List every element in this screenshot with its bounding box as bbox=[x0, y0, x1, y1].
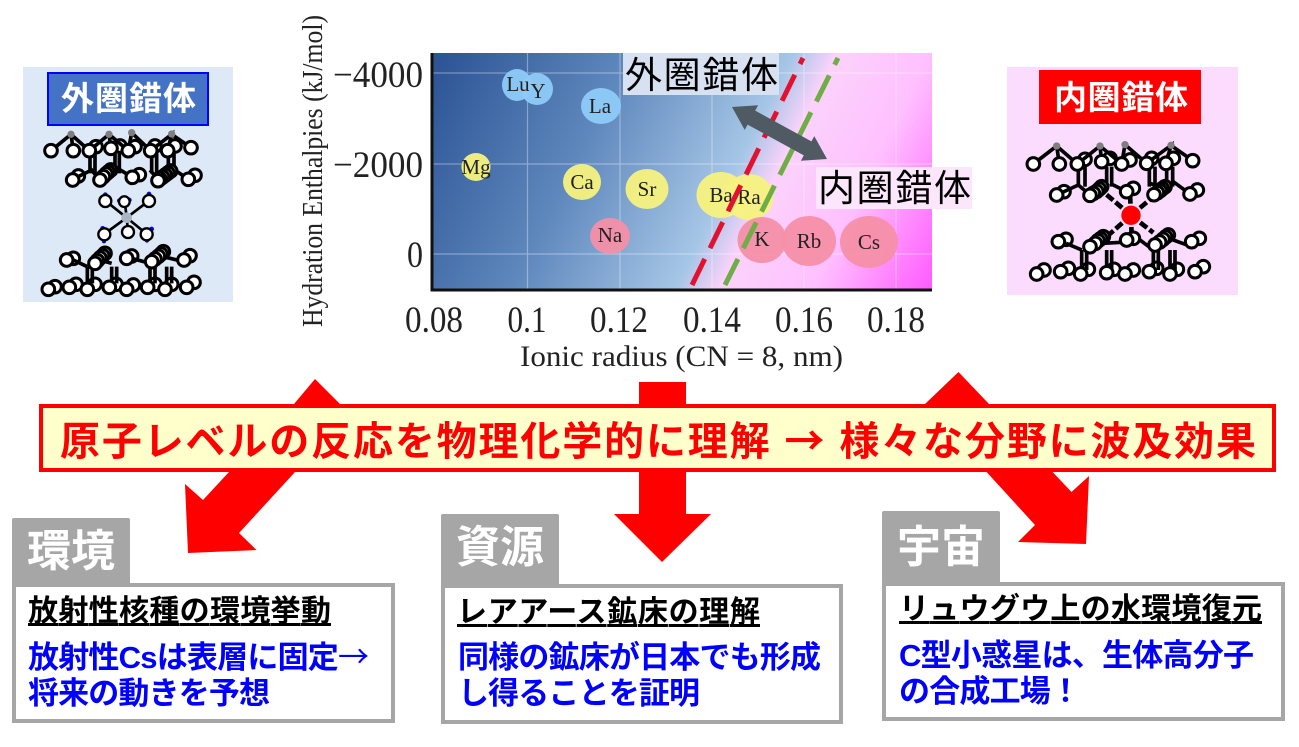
heading: environment: 放射性核種の環境挙動 bbox=[28, 595, 331, 628]
tab: resources bbox=[441, 514, 559, 586]
card: environment bbox=[14, 585, 393, 721]
body: environment: 将来の動きを予想 bbox=[28, 676, 270, 711]
label: outer-sphere region: 外圏錯体 bbox=[625, 55, 778, 96]
label: outer-sphere complex: 外圏錯体 bbox=[61, 80, 196, 117]
arrow: two-way transition bbox=[732, 105, 827, 161]
heading: resources: レアアース鉱床の理解 bbox=[457, 596, 760, 629]
label: inner-sphere complex bbox=[1039, 70, 1201, 124]
axes bbox=[432, 53, 932, 290]
y-axis tick labels: −2000 bbox=[333, 145, 423, 186]
tab: environment bbox=[12, 518, 130, 586]
body: space bbox=[899, 638, 1254, 709]
icon: inner-sphere molecular structure bbox=[1027, 141, 1210, 280]
tab: environment: 環境 bbox=[27, 527, 115, 576]
body: resources: し得ることを証明 bbox=[458, 676, 700, 711]
x-axis tick labels: 0.08 bbox=[405, 300, 463, 341]
data bubbles: Sr bbox=[638, 177, 656, 201]
y-axis tick labels: 0 bbox=[407, 235, 423, 276]
data bubbles: Lu bbox=[506, 72, 530, 96]
data bubbles: K bbox=[754, 227, 770, 251]
x-axis title: Ionic radius (CN = 8, nm) bbox=[520, 340, 843, 373]
green dashed boundary bbox=[725, 58, 838, 285]
y-axis tick labels bbox=[333, 55, 423, 276]
x-axis tick labels: 0.1 bbox=[508, 300, 546, 341]
body: resources bbox=[458, 640, 821, 711]
tab: space: 宇宙 bbox=[897, 523, 985, 572]
data bubbles bbox=[461, 69, 898, 268]
data bubbles: Y bbox=[530, 79, 546, 103]
tab: resources: 資源 bbox=[456, 523, 544, 572]
x-axis tick labels bbox=[405, 300, 925, 341]
red dashed boundary bbox=[692, 58, 803, 285]
data bubbles: Cs bbox=[858, 230, 880, 254]
x-axis tick labels: 0.14 bbox=[683, 300, 741, 341]
arrow: space bbox=[925, 372, 1089, 544]
body: environment bbox=[28, 632, 369, 711]
tab: space bbox=[882, 511, 1000, 583]
body: space: の合成工場！ bbox=[899, 674, 1081, 709]
card: space bbox=[884, 584, 1283, 719]
label: outer-sphere complex bbox=[48, 73, 208, 125]
x-axis tick labels: 0.18 bbox=[867, 300, 925, 341]
data bubbles: Ca bbox=[570, 170, 594, 194]
panel: outer-sphere complex bbox=[23, 67, 233, 302]
panel: inner-sphere complex bbox=[1007, 67, 1238, 295]
data bubbles: Na bbox=[598, 223, 623, 247]
body: space: C型小惑星は、生体高分子 bbox=[899, 638, 1254, 673]
panel: environment bbox=[12, 518, 393, 721]
panel: space bbox=[882, 511, 1283, 719]
body: environment: 放射性Csは表層に固定→ bbox=[28, 632, 369, 677]
panel: resources bbox=[441, 514, 841, 722]
data bubbles: Ba bbox=[709, 183, 733, 207]
x-axis tick labels: 0.12 bbox=[590, 300, 648, 341]
body: resources: 同様の鉱床が日本でも形成 bbox=[458, 640, 821, 675]
data bubbles: La bbox=[589, 94, 612, 118]
arrow: environment bbox=[185, 379, 340, 553]
data bubbles: Mg bbox=[461, 155, 491, 179]
x-axis tick labels: 0.16 bbox=[775, 300, 833, 341]
data bubbles: Rb bbox=[797, 229, 821, 253]
banner: key message: 原子レベルの反応を物理化学的に理解 → 様々な分野に波及効果 bbox=[60, 409, 1256, 467]
data bubbles: Ra bbox=[737, 185, 761, 209]
icon: outer-sphere molecular structure bbox=[42, 129, 201, 296]
arrow: resources bbox=[614, 382, 711, 562]
heading: space: リュウグウ上の水環境復元 bbox=[899, 593, 1262, 626]
chart: hydration enthalpy vs ionic radius bbox=[297, 15, 972, 373]
y-axis tick labels: −4000 bbox=[333, 55, 423, 96]
label: inner-sphere complex: 内圏錯体 bbox=[1054, 79, 1188, 116]
label: inner-sphere region: 内圏錯体 bbox=[818, 168, 971, 209]
card: resources bbox=[443, 586, 841, 722]
